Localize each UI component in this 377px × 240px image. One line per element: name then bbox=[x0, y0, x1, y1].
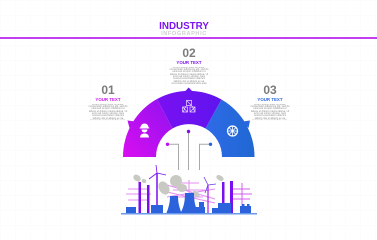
pylons and pink wires bbox=[126, 180, 252, 212]
heading 03: YOUR TEXT bbox=[257, 97, 283, 102]
segment 2 bbox=[157, 88, 222, 128]
heading 01: YOUR TEXT bbox=[95, 97, 121, 102]
icon: gear wheel bbox=[228, 126, 238, 136]
header rule bbox=[0, 37, 377, 38]
number 03: 03 bbox=[263, 83, 277, 97]
wind turbines bbox=[149, 165, 216, 213]
heading 02: YOUR TEXT bbox=[176, 60, 202, 65]
icon: worker bbox=[140, 124, 149, 138]
industrial skyline illustration bbox=[121, 165, 257, 214]
purple chimneys bbox=[138, 181, 233, 213]
connector 1 bbox=[166, 143, 178, 170]
number 01: 01 bbox=[101, 83, 115, 97]
segment 3 bbox=[206, 100, 255, 157]
text block 03 bbox=[250, 83, 290, 120]
connector 3 bbox=[200, 143, 212, 170]
blue factory buildings bbox=[126, 193, 251, 214]
smoke clouds bbox=[132, 173, 225, 198]
subtitle: INFOGRAPHIC bbox=[161, 30, 207, 36]
text block 01 bbox=[88, 83, 128, 120]
segment 1 bbox=[123, 99, 172, 157]
connector 2 bbox=[187, 130, 190, 170]
title: INDUSTRY bbox=[159, 20, 209, 32]
ground line bbox=[121, 213, 257, 214]
text block 02 bbox=[170, 46, 208, 84]
number 02: 02 bbox=[182, 46, 196, 60]
icon: network blocks bbox=[182, 100, 195, 112]
